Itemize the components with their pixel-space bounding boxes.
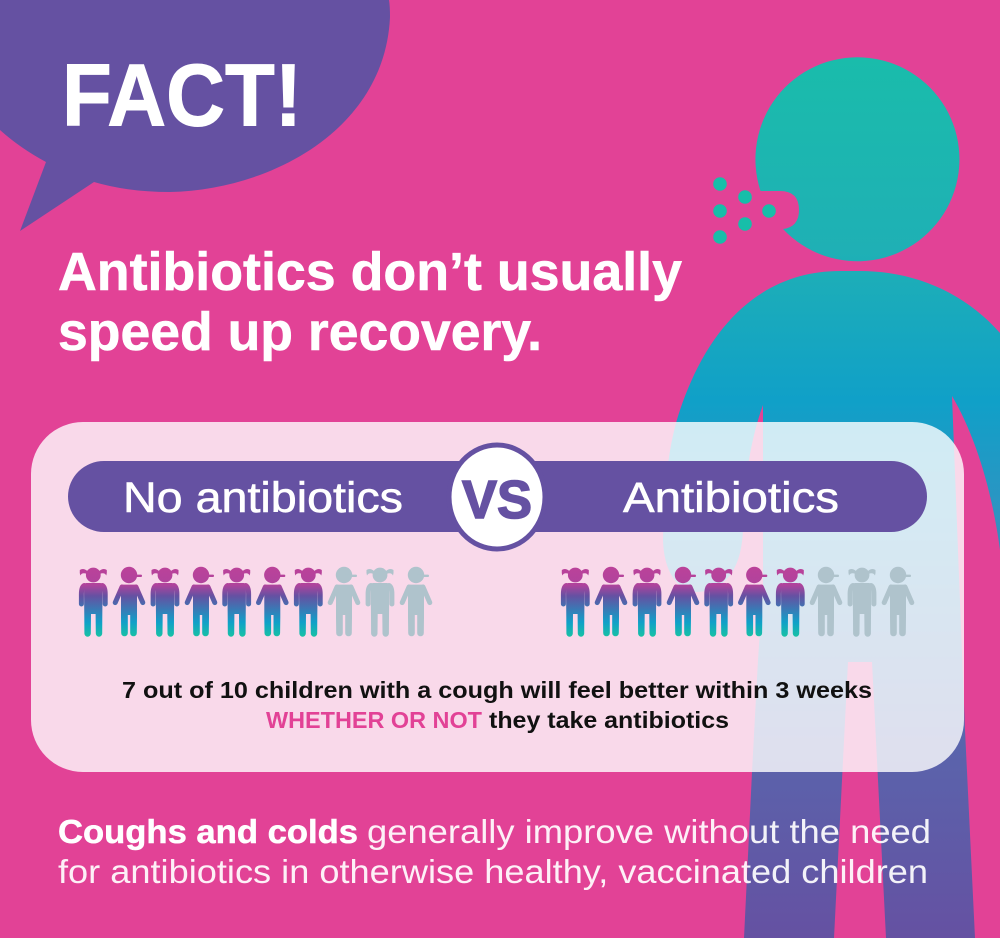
children row: no antibiotics [80,567,430,637]
closing statement [58,813,931,890]
icon: body [663,271,1000,938]
statistic text: they take antibiotics [489,707,729,733]
statistic text: 7 out of 10 children with a cough will feel better within 3 weeks [122,677,872,703]
statistic text: WHETHER OR NOT [266,707,482,733]
VS badge [449,445,545,549]
panel background [31,422,964,772]
closing statement: Coughs and colds [58,813,358,850]
label: no antibiotics: No antibiotics [123,474,403,522]
title: FACT!: FACT! [62,46,302,144]
closing statement: for antibiotics in otherwise healthy, vaccinated children [58,853,928,890]
headline: speed up recovery. [58,302,542,362]
children row: antibiotics [562,567,912,637]
panel: comparison [31,422,964,772]
statistic text [122,677,872,733]
speech bubble [0,0,390,231]
icon: cough droplets [713,177,776,244]
VS badge: VS [462,470,532,530]
icon: head with open mouth [755,57,959,261]
person silhouette [663,57,1000,938]
comparison pill [68,461,927,532]
label: antibiotics: Antibiotics [623,474,839,522]
headline: Antibiotics don’t usually [58,242,682,302]
closing statement: generally improve without the need [367,813,931,850]
